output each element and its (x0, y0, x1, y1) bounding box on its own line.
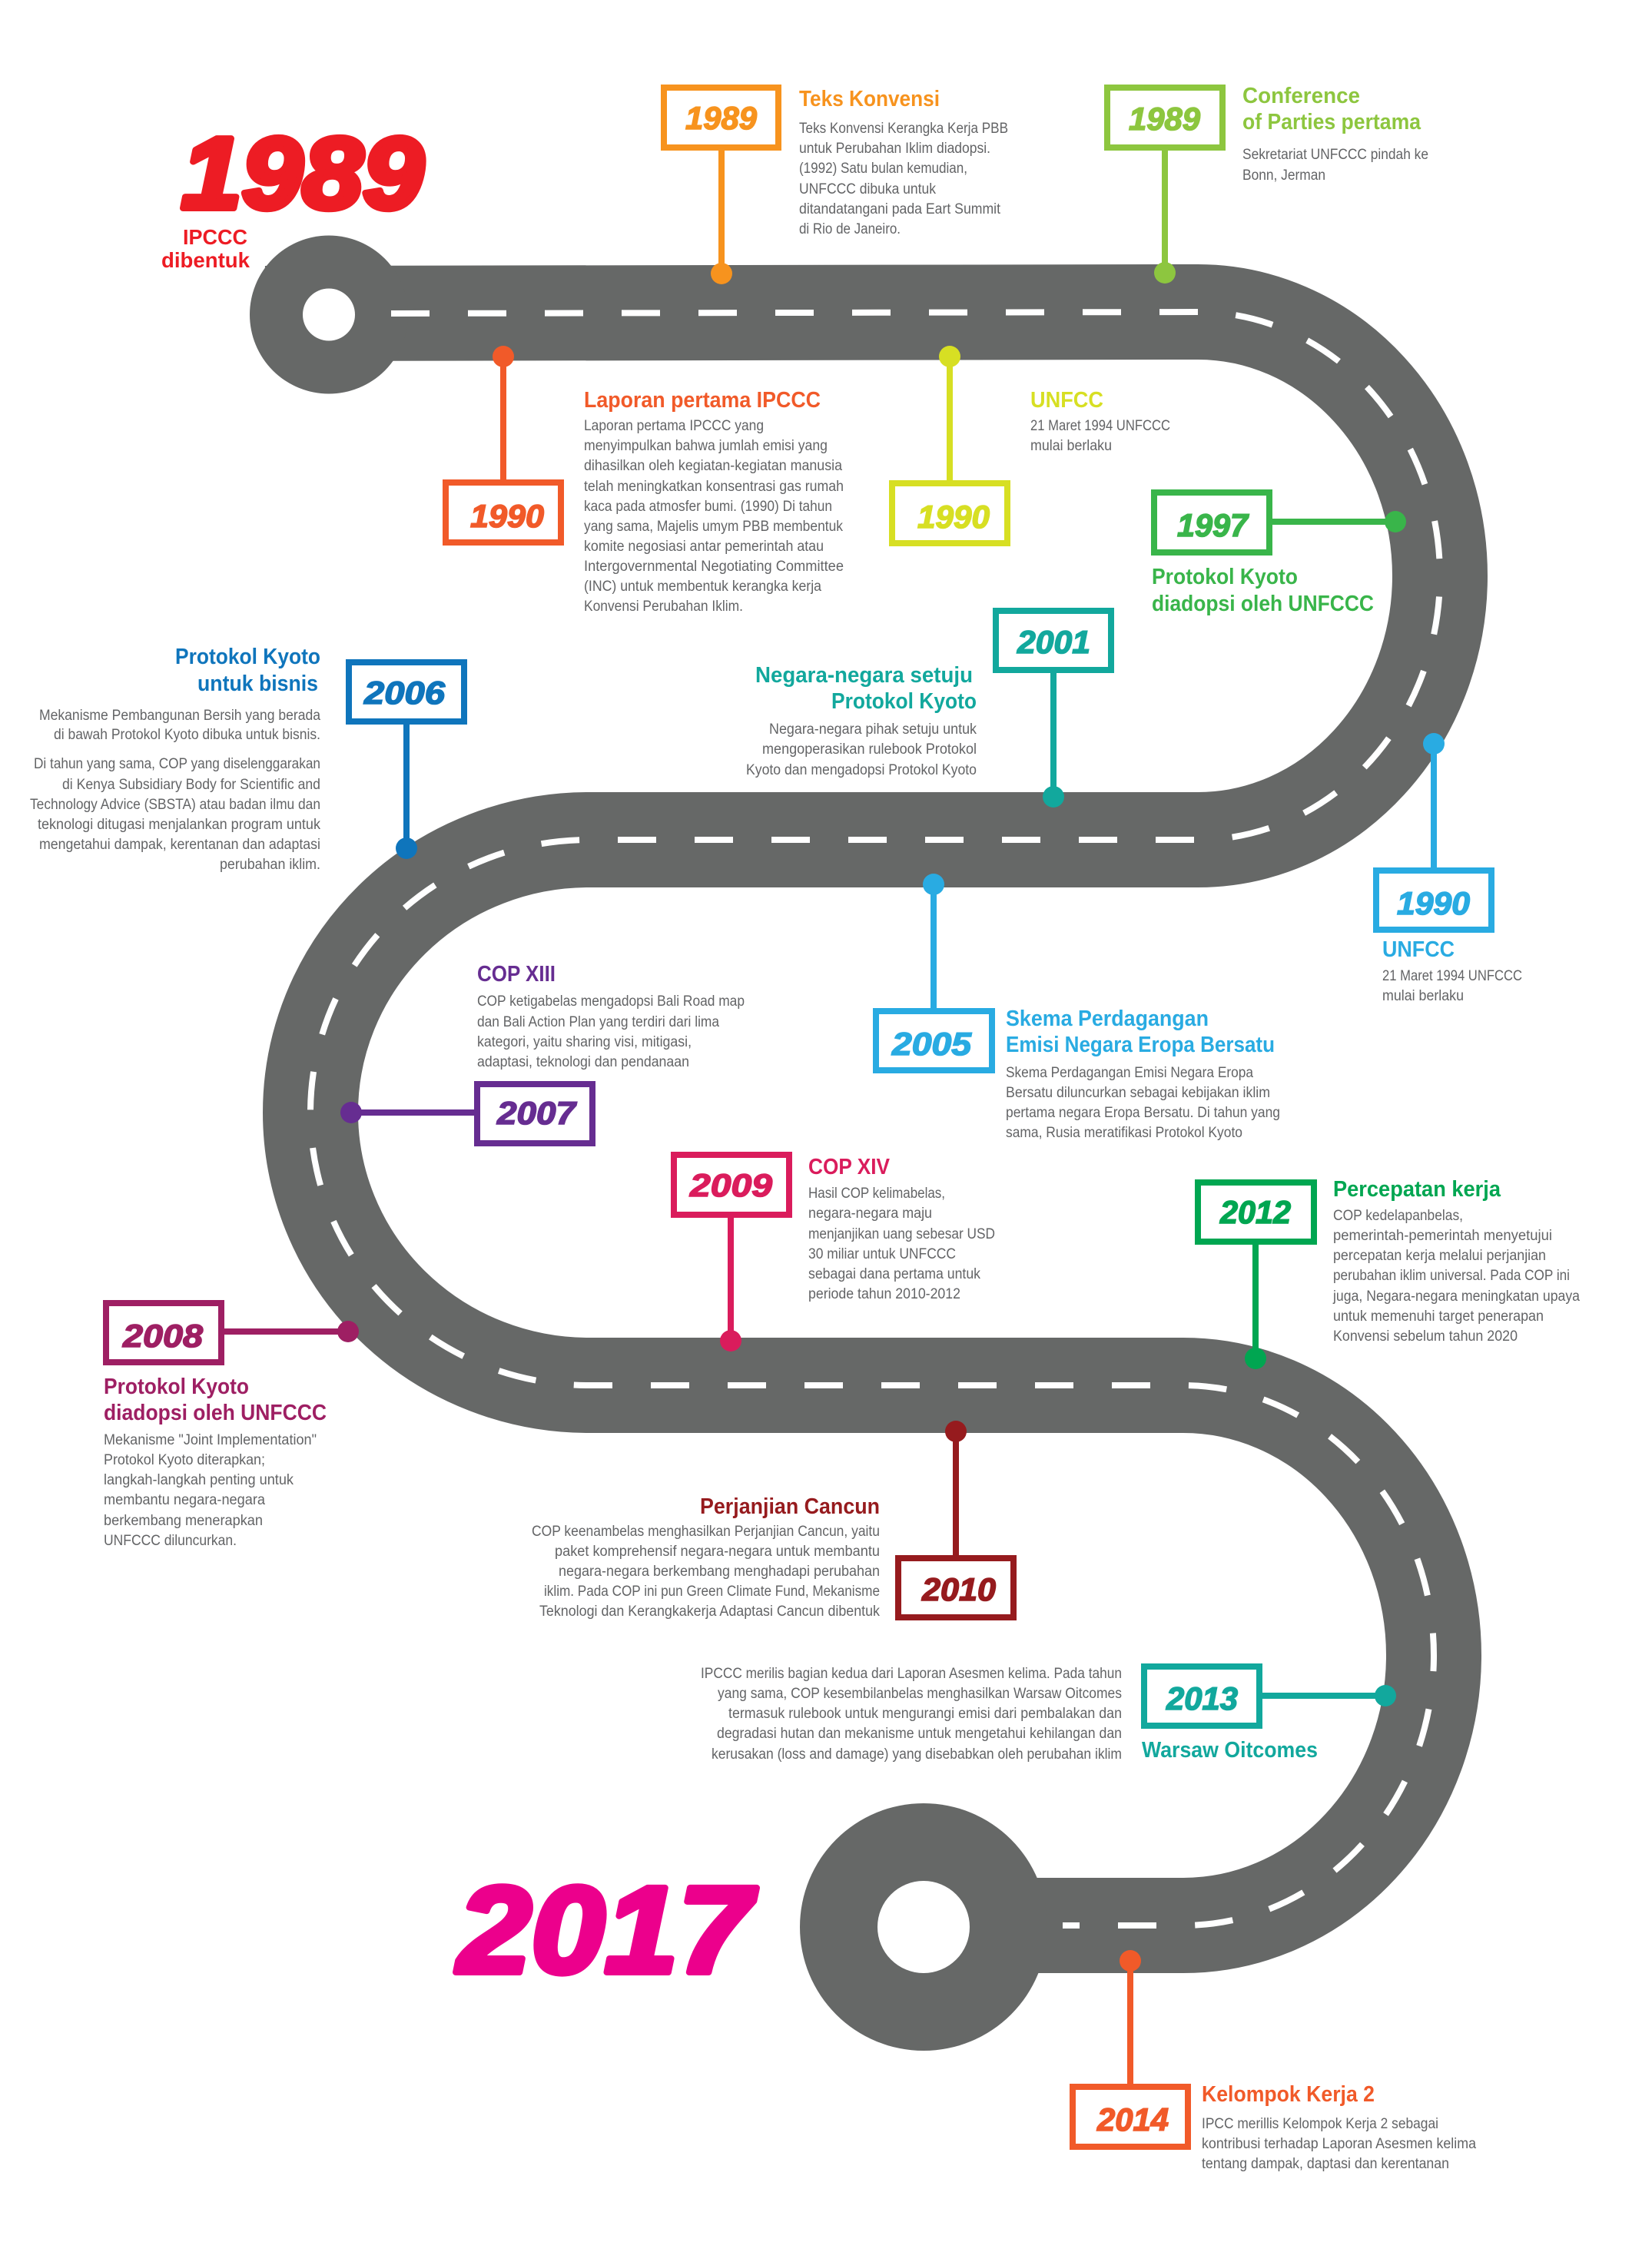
year sign: 1990 (1397, 885, 1470, 921)
marker: stem and dot (939, 346, 960, 480)
body text: Mekanisme Pembangunan Bersih yang berada (39, 708, 320, 724)
year sign (664, 88, 778, 148)
body text: teknologi ditugasi menjalankan program untuk (38, 817, 320, 833)
body text: kerusakan (loss and damage) yang disebabkan oleh perubahan iklim (712, 1746, 1122, 1763)
body text: kontribusi terhadap Laporan Asesmen kelima (1202, 2136, 1476, 2152)
milestone: 2014 Kelompok Kerja 2 (1073, 1950, 1476, 2172)
body text: paket komprehensif negara-negara untuk membantu (555, 1544, 880, 1560)
year sign: 2013 (1166, 1680, 1238, 1716)
body text: 30 miliar untuk UNFCCC (808, 1246, 956, 1262)
marker: line and dot (1262, 1685, 1396, 1706)
body text: komite negosiasi antar pemerintah atau (584, 539, 824, 555)
body text (746, 721, 977, 778)
milestone: 1997 Protokol Kyoto (1152, 493, 1406, 616)
heading: Perjanjian Cancun (700, 1494, 880, 1519)
year sign (349, 662, 464, 721)
year sign (898, 1558, 1013, 1617)
body text (799, 121, 1008, 237)
body text: (1992) Satu bulan kemudian, (799, 161, 967, 177)
body text: Konvensi Perubahan Iklim. (584, 599, 743, 615)
milestone: 2001 Negara-negara setuju (746, 611, 1111, 808)
heading: Negara-negara setuju (755, 663, 973, 688)
body text (532, 1524, 880, 1620)
milestone: 2010 Perjanjian Cancun (532, 1421, 1013, 1620)
body text: Bersatu diluncurkan sebagai kebijakan iklim (1006, 1085, 1270, 1101)
start year 1989 heading: 1989 (181, 117, 423, 230)
milestone: 1990 UNFCC (lime) (892, 346, 1170, 543)
milestone: 2005 Skema Perdagangan (876, 874, 1280, 1141)
year sign: 2012 (1219, 1194, 1291, 1230)
year sign: 1990 (917, 499, 990, 535)
body text (1242, 147, 1428, 184)
body text: Hasil COP kelimabelas, (808, 1186, 945, 1202)
year sign (876, 1011, 992, 1070)
body text: Technology Advice (SBSTA) atau badan ilmu dan (30, 797, 320, 813)
heading: COP XIII (477, 962, 556, 987)
body text: langkah-langkah penting untuk (104, 1472, 294, 1488)
body text: di Rio de Janeiro. (799, 221, 901, 237)
body text (1382, 968, 1522, 1004)
winding road (250, 235, 1440, 2051)
body text: perubahan iklim universal. Pada COP ini (1333, 1268, 1570, 1284)
heading: diadopsi oleh UNFCCC (104, 1401, 327, 1425)
year sign (106, 1303, 221, 1362)
year sign (1144, 1667, 1259, 1726)
heading: UNFCC (1382, 937, 1455, 962)
body text: COP kedelapanbelas, (1333, 1208, 1463, 1224)
body text: Bonn, Jerman (1242, 167, 1325, 184)
year sign: 2001 (1017, 624, 1090, 660)
year sign: 1989 (685, 100, 758, 136)
milestone: 1990 Laporan pertama IPCCC (446, 346, 844, 615)
body text (1332, 1208, 1580, 1345)
year sign: 2006 (363, 675, 446, 711)
heading (104, 1375, 327, 1425)
body text: kategori, yaitu sharing visi, mitigasi, (477, 1034, 692, 1050)
body text: Teks Konvensi Kerangka Kerja PBB (799, 121, 1008, 137)
body text: dan Bali Action Plan yang terdiri dari lima (477, 1014, 719, 1030)
heading: Skema Perdagangan (1006, 1007, 1209, 1031)
marker: line and dot (224, 1321, 359, 1342)
body text: untuk Perubahan Iklim diadopsi. (799, 141, 990, 157)
body text: mengoperasikan rulebook Protokol (762, 741, 977, 758)
year sign (996, 611, 1111, 670)
year sign: 2007 (496, 1095, 577, 1131)
body text: pemerintah-pemerintah menyetujui (1333, 1228, 1552, 1244)
heading (1006, 1007, 1275, 1057)
body text: 21 Maret 1994 UNFCCC (1382, 968, 1522, 984)
heading: of Parties pertama (1242, 110, 1421, 134)
body text: kaca pada atmosfer bumi. (1990) Di tahun (584, 499, 832, 515)
body text: Intergovernmental Negotiating Committee (584, 559, 844, 575)
year sign (1073, 2087, 1188, 2147)
body text: perubahan iklim. (220, 857, 320, 873)
marker: line and dot (340, 1102, 474, 1123)
body text: Sekretariat UNFCCC pindah ke (1242, 147, 1428, 163)
body text (701, 1666, 1122, 1763)
body text: Teknologi dan Kerangkakerja Adaptasi Cancun dibentuk (539, 1604, 880, 1620)
marker: stem and dot (1423, 733, 1445, 867)
body text: ditandatangani pada Eart Summit (799, 201, 1001, 217)
body text (104, 1432, 317, 1549)
body text: COP ketigabelas mengadopsi Bali Road map (477, 993, 745, 1010)
year sign: 2009 (689, 1167, 773, 1203)
body text: tentang dampak, daptasi dan kerentanan (1202, 2156, 1449, 2172)
body text: mulai berlaku (1382, 988, 1464, 1004)
milestone: 2009 COP XIV (674, 1155, 995, 1352)
heading: Protokol Kyoto (1152, 565, 1298, 589)
body text: IPCCC merilis bagian kedua dari Laporan Asesmen kelima. Pada tahun (701, 1666, 1122, 1682)
heading: Warsaw Oitcomes (1142, 1738, 1318, 1763)
marker: stem and dot (493, 346, 514, 479)
heading: Protokol Kyoto (175, 645, 320, 669)
milestone: 2007 COP XIII (340, 962, 745, 1143)
year sign (892, 483, 1007, 543)
body text: pertama negara Eropa Bersatu. Di tahun yang (1006, 1105, 1280, 1121)
body text: adaptasi, teknologi dan pendanaan (477, 1054, 689, 1070)
heading: diadopsi oleh UNFCCC (1152, 592, 1374, 616)
caption: IPCCC dibentuk: IPCCC (183, 225, 247, 249)
heading: Emisi Negara Eropa Bersatu (1006, 1033, 1275, 1057)
body text (477, 993, 745, 1070)
body text: telah meningkatkan konsentrasi gas rumah (584, 479, 844, 495)
heading: untuk bisnis (197, 672, 318, 696)
heading: Protokol Kyoto (831, 689, 977, 714)
year sign: 2008 (122, 1318, 204, 1354)
body text: UNFCCC dibuka untuk (799, 181, 936, 197)
body text: IPCC merillis Kelompok Kerja 2 sebagai (1202, 2116, 1438, 2132)
body text (1030, 418, 1170, 454)
marker: stem and dot (945, 1421, 967, 1555)
marker: stem and dot (1245, 1245, 1266, 1369)
body text: berkembang menerapkan (104, 1513, 263, 1529)
body text: periode tahun 2010-2012 (808, 1286, 960, 1302)
body text (808, 1186, 995, 1302)
body text: UNFCCC diluncurkan. (104, 1533, 237, 1549)
body text: negara-negara berkembang menghadapi perubahan (559, 1564, 880, 1580)
heading: COP XIV (808, 1155, 891, 1179)
heading: Laporan pertama IPCCC (584, 388, 821, 413)
year sign: 2014 (1096, 2101, 1169, 2138)
year sign (674, 1155, 789, 1215)
milestone: 1989 Conference of Parties pertama (1107, 84, 1428, 284)
body text: Kyoto dan mengadopsi Protokol Kyoto (746, 762, 977, 778)
milestone: 2012 Percepatan kerja (1198, 1177, 1580, 1369)
marker: stem and dot (1043, 673, 1064, 808)
marker: stem and dot (1154, 151, 1176, 284)
heading: Percepatan kerja (1333, 1177, 1501, 1202)
body text (1006, 1065, 1280, 1141)
body text: juga, Negara-negara meningkatan upaya (1332, 1289, 1580, 1305)
caption: IPCCC dibentuk: dibentuk (161, 248, 250, 272)
heading (755, 663, 977, 714)
heading: Teks Konvensi (799, 87, 940, 111)
marker: stem and dot (720, 1218, 741, 1352)
body text: Skema Perdagangan Emisi Negara Eropa (1006, 1065, 1253, 1081)
body text: percepatan kerja melalui perjanjian (1333, 1248, 1546, 1264)
marker: stem and dot (1120, 1950, 1141, 2084)
year sign (477, 1084, 592, 1143)
year sign (446, 483, 561, 542)
caption: IPCCC dibentuk (161, 225, 250, 272)
body text: degradasi hutan dan mekanisme untuk mengetahui kehilangan dan (717, 1726, 1122, 1742)
marker: line and dot (1272, 511, 1406, 532)
year sign: 1997 (1177, 507, 1249, 543)
year sign: 1989 (1129, 101, 1201, 137)
body text: menyimpulkan bahwa jumlah emisi yang (584, 438, 828, 454)
marker: stem and dot (923, 874, 944, 1008)
body text: Protokol Kyoto diterapkan; (104, 1452, 265, 1468)
year sign (1376, 871, 1491, 930)
year sign (1198, 1182, 1314, 1242)
year sign: 2005 (891, 1026, 972, 1062)
body text: Di tahun yang sama, COP yang diselenggarakan (34, 756, 320, 772)
marker: stem and dot (396, 725, 417, 859)
body text: yang sama, COP kesembilanbelas menghasilkan Warsaw Oitcomes (718, 1686, 1122, 1702)
body text (30, 708, 320, 873)
body text: mengetahui dampak, kerentanan dan adaptasi (39, 837, 320, 853)
body text: membantu negara-negara (104, 1492, 265, 1508)
year sign: 1990 (470, 498, 544, 534)
body text: menjanjikan uang sebesar USD (808, 1226, 995, 1242)
body text: untuk memenuhi target penerapan (1333, 1308, 1544, 1325)
milestone: 2013 Warsaw Oitcomes (701, 1666, 1396, 1763)
body text: Negara-negara pihak setuju untuk (769, 721, 977, 738)
heading: Kelompok Kerja 2 (1202, 2082, 1375, 2107)
end year 2017 heading: 2017 (456, 1861, 758, 1998)
heading: UNFCC (1030, 388, 1103, 413)
body text: dihasilkan oleh kegiatan-kegiatan manusia (584, 458, 842, 474)
body text: (INC) untuk membentuk kerangka kerja (584, 579, 821, 595)
milestone: 1989 Teks Konvensi (664, 87, 1008, 284)
heading: Conference (1242, 84, 1360, 108)
year sign: 2010 (921, 1571, 996, 1607)
body text: sama, Rusia meratifikasi Protokol Kyoto (1006, 1125, 1242, 1141)
heading (175, 645, 320, 696)
body text: 21 Maret 1994 UNFCCC (1030, 418, 1170, 434)
body text: COP keenambelas menghasilkan Perjanjian Cancun, yaitu (532, 1524, 880, 1540)
milestone: 2008 Protokol Kyoto diadopsi (104, 1303, 359, 1549)
body text: di Kenya Subsidiary Body for Scientific and (62, 777, 320, 793)
body text (1202, 2116, 1476, 2172)
marker: stem and dot (711, 151, 732, 284)
year sign (1107, 88, 1222, 148)
body text: negara-negara maju (808, 1206, 932, 1222)
body text: sebagai dana pertama untuk (808, 1266, 980, 1282)
year sign (1154, 493, 1269, 552)
body text: Laporan pertama IPCCC yang (584, 418, 764, 434)
body text: mulai berlaku (1030, 438, 1112, 454)
body text: termasuk rulebook untuk mengurangi emisi dari pembalakan dan (728, 1706, 1122, 1722)
heading (1152, 565, 1374, 616)
milestone: 2006 Protokol Kyoto untuk bisnis (30, 645, 464, 873)
milestone: 1990 UNFCC (blue) (1376, 733, 1522, 1004)
body text (584, 418, 844, 615)
body text: di bawah Protokol Kyoto dibuka untuk bisnis. (54, 727, 320, 743)
heading: Protokol Kyoto (104, 1375, 249, 1399)
heading (1242, 84, 1421, 134)
body text: yang sama, Majelis umym PBB membentuk (584, 519, 843, 535)
body text: Mekanisme "Joint Implementation" (104, 1432, 317, 1448)
body text: Konvensi sebelum tahun 2020 (1333, 1328, 1518, 1345)
body text: iklim. Pada COP ini pun Green Climate Fund, Mekanisme (544, 1584, 880, 1600)
